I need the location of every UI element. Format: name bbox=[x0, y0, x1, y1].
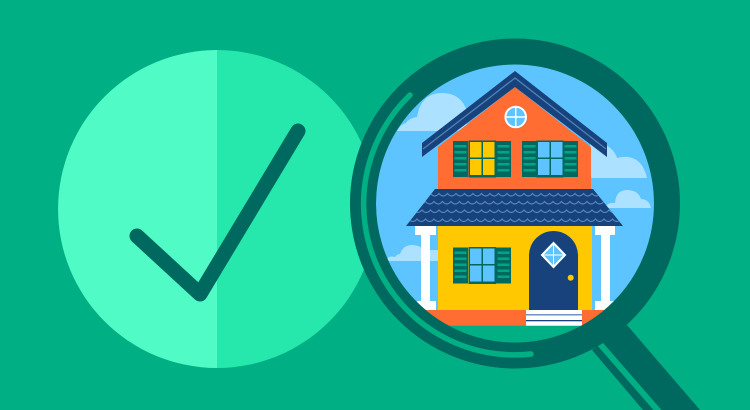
upper left window bbox=[453, 140, 511, 178]
circle: darker half bbox=[217, 50, 376, 368]
cloud: lower right bbox=[605, 190, 651, 208]
cloud: right bbox=[590, 143, 647, 178]
foundation bbox=[426, 310, 604, 326]
steps bbox=[526, 310, 582, 326]
upper storey wall bbox=[438, 87, 591, 189]
icon: check mark bbox=[137, 131, 298, 294]
magnifying glass ring bbox=[363, 52, 667, 356]
gable roof bbox=[422, 71, 607, 157]
roof highlight stripe bbox=[423, 78, 606, 149]
handle highlight bbox=[600, 344, 664, 410]
check circle bbox=[58, 50, 376, 368]
illustration: home inspection check bbox=[58, 38, 700, 410]
right column bbox=[595, 226, 615, 310]
front door bbox=[529, 231, 578, 310]
sky bbox=[370, 60, 660, 326]
ground floor window bbox=[453, 247, 511, 284]
cloud: lower left bbox=[386, 245, 438, 261]
lens scene bbox=[370, 60, 660, 326]
ground floor wall bbox=[438, 226, 592, 310]
door diamond window bbox=[542, 243, 565, 267]
round attic window bbox=[505, 107, 526, 127]
cloud: upper left bbox=[397, 93, 467, 131]
magnifying glass handle bbox=[592, 325, 700, 410]
door knob bbox=[568, 275, 574, 281]
ring highlight bbox=[364, 95, 531, 355]
upper right window bbox=[522, 140, 578, 178]
roof scallops bbox=[400, 194, 626, 222]
circle: light half bbox=[58, 50, 217, 368]
porch roof bbox=[406, 189, 623, 226]
left column bbox=[415, 226, 436, 310]
